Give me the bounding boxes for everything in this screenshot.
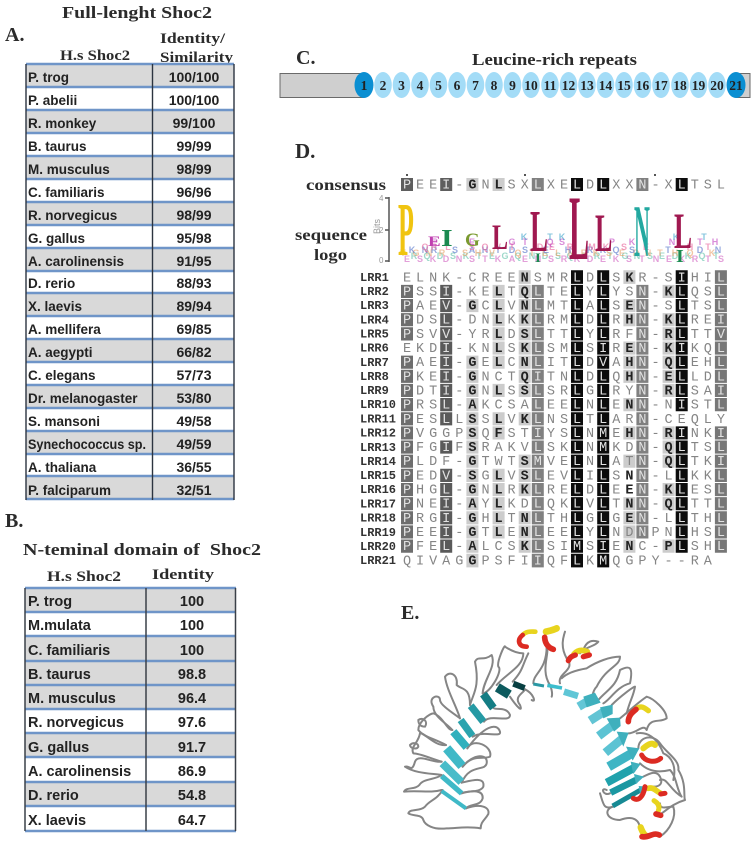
alignment sequences: P KE I - G NCT Q I TN L D L Q H N - E L LD L bbox=[403, 370, 725, 385]
alignment sequences: P VGGP S Q F ST I YS L N M E H N - R I NK I bbox=[403, 427, 725, 442]
panel A identity values: 100/100 bbox=[169, 92, 220, 108]
panel A identity values: 49/59 bbox=[176, 436, 212, 452]
panel A identity values: 91/95 bbox=[176, 253, 212, 269]
alignment row labels: LRR14 bbox=[360, 455, 396, 469]
panel A species names: A. aegypti bbox=[28, 345, 93, 360]
panel A letter: A. bbox=[5, 24, 24, 46]
panel C title: Leucine-rich repeats bbox=[472, 50, 637, 69]
alignment row labels: LRR6 bbox=[360, 342, 389, 356]
repeat numbers: 18 bbox=[673, 78, 687, 93]
alignment row labels: LRR18 bbox=[360, 512, 396, 526]
panel A identity values: 53/80 bbox=[176, 390, 212, 406]
panel B species names: P. trog bbox=[28, 594, 72, 610]
logo large letters: I bbox=[441, 225, 453, 251]
alignment sequences: P AE V - G C L V N L MT L A L S E N -S L TS L bbox=[403, 300, 725, 315]
logo large letters: G bbox=[465, 230, 480, 251]
consensus sequence: P EE I - G N L SX L XE L D L XX N -X L TSL bbox=[403, 178, 725, 194]
repeat numbers: 8 bbox=[491, 78, 498, 93]
alignment sequences: P ED V - S G L V S L EV L I L S N N -L L KK L bbox=[403, 469, 725, 484]
repeat numbers: 7 bbox=[472, 78, 479, 93]
logo axis labels: 2 bbox=[379, 226, 384, 235]
sequence logo label: logo bbox=[314, 247, 347, 264]
consensus dots bbox=[406, 174, 656, 176]
panel A species names: S. mansoni bbox=[28, 414, 100, 429]
sequence logo label: sequence bbox=[295, 227, 367, 244]
panel B identity values: 100 bbox=[180, 643, 204, 659]
panel A species names: Synechococcus sp. bbox=[28, 437, 146, 452]
panel A identity values: 36/55 bbox=[176, 459, 212, 475]
panel A species names: M. musculus bbox=[28, 162, 110, 177]
panel A identity values: 57/73 bbox=[176, 367, 212, 383]
panel B identity values: 96.4 bbox=[178, 691, 206, 707]
logo large letters: I bbox=[676, 247, 684, 267]
panel B species names: M.mulata bbox=[28, 618, 92, 634]
panel A identity values: 98/99 bbox=[176, 207, 212, 223]
panel B species names: D. rerio bbox=[28, 788, 79, 804]
alignment sequences: P SV V -YR L D S L TT L Y L RF N - R L TT V bbox=[403, 328, 726, 343]
alignment row labels: LRR4 bbox=[360, 314, 389, 328]
consensus shading bbox=[401, 178, 688, 191]
alignment row labels: LRR17 bbox=[360, 498, 396, 512]
panel A species names: Dr. melanogaster bbox=[28, 391, 138, 406]
panel B species names: A. carolinensis bbox=[28, 764, 131, 780]
panel A identity values: 99/99 bbox=[176, 138, 212, 154]
alignment sequences: P RS L - A KCSA L EE L N L E N N -N I ST L bbox=[403, 399, 725, 414]
panel A identity values: 89/94 bbox=[176, 298, 212, 314]
panel B species names: B. taurus bbox=[28, 667, 91, 683]
panel B identity values: 100 bbox=[180, 618, 204, 634]
alignment sequences: ELNK-CREE N SMR L D L S K R-S I HI L bbox=[403, 271, 725, 286]
consensus label: consensus bbox=[306, 177, 386, 194]
logo large letters: L bbox=[530, 198, 548, 264]
panel A column headers: Identity/ bbox=[160, 31, 226, 47]
alignment row labels: LRR9 bbox=[360, 384, 389, 398]
alignment row labels bbox=[360, 271, 396, 568]
panel B species names: G. gallus bbox=[28, 740, 89, 756]
panel A species names: A. thaliana bbox=[28, 460, 97, 475]
sequence logo label bbox=[295, 227, 367, 264]
alignment sequences: P DT I - G N L S S L SR L G L RY N - R L SA I bbox=[403, 384, 725, 400]
panel B column headers: H.s Shoc2 bbox=[47, 569, 121, 585]
panel A identity values: 69/85 bbox=[176, 321, 212, 337]
alignment sequences: P EE I - G T L E N L EE L Y L ND N PN L HS L bbox=[403, 526, 725, 541]
alignment row labels: LRR13 bbox=[360, 441, 396, 455]
logo axis bbox=[385, 197, 389, 262]
panel A identity values: 32/51 bbox=[176, 482, 212, 498]
panel B identity values: 100 bbox=[180, 594, 204, 610]
panel A species names: B. taurus bbox=[28, 139, 87, 154]
panel A column headers: Similarity bbox=[160, 50, 234, 66]
logo small letters: ESKDNSTKAENSRKDEKSTNEKRTS bbox=[404, 254, 724, 264]
repeat numbers: 12 bbox=[562, 78, 576, 93]
logo large letters: N bbox=[634, 190, 650, 272]
repeat numbers: 4 bbox=[417, 78, 424, 93]
panel A species names: R. norvegicus bbox=[28, 208, 117, 223]
alignment sequences: P AE I - G E L C N L IT L D V A H N - Q L EH L bbox=[403, 356, 725, 371]
panel B species names: M. musculus bbox=[28, 691, 116, 707]
repeat numbers: 14 bbox=[599, 78, 612, 93]
panel A column headers: H.s Shoc2 bbox=[60, 48, 130, 64]
alignment sequences: P SS I -KE L T Q L TE L Y L YS N - K L QS L bbox=[403, 285, 725, 300]
repeat numbers: 11 bbox=[544, 78, 557, 93]
alignment row labels: LRR10 bbox=[360, 398, 396, 412]
repeat numbers: 20 bbox=[710, 78, 724, 93]
alignment row labels: LRR3 bbox=[360, 299, 389, 313]
panel B identity values: 91.7 bbox=[178, 740, 206, 756]
logo axis labels bbox=[372, 194, 384, 265]
panel C letter: C. bbox=[296, 47, 315, 69]
repeat numbers bbox=[361, 78, 743, 93]
alignment row labels: LRR20 bbox=[360, 540, 396, 554]
panel A identity values: 49/58 bbox=[176, 413, 212, 429]
repeat numbers: 10 bbox=[524, 78, 538, 93]
panel A identity values: 95/98 bbox=[176, 230, 212, 246]
panel B identity values: 86.9 bbox=[178, 764, 206, 780]
panel B: N-terminal domain table bbox=[5, 510, 261, 831]
alignment sequences: P NE I - A Y L KD L QK L V L T N N - Q L TT L bbox=[403, 498, 725, 513]
alignment row labels: LRR1 bbox=[360, 271, 389, 285]
repeat numbers: 19 bbox=[692, 78, 706, 93]
panel B title: N-teminal domain of Shoc2 bbox=[23, 540, 261, 559]
panel A species names: G. gallus bbox=[28, 231, 85, 246]
repeat numbers: 6 bbox=[454, 78, 461, 93]
alignment row labels: LRR15 bbox=[360, 469, 396, 483]
alignment sequences: P HG L - G N L R K L RE L D L E E N - K L ES L bbox=[403, 484, 725, 498]
panel A identity values: 88/93 bbox=[176, 275, 212, 291]
alignment sequences: P FE L - A LCS K L SI M S I E N C- P L SH L bbox=[403, 540, 725, 555]
alignment sequences bbox=[403, 271, 726, 569]
protein loops bbox=[404, 632, 685, 837]
alignment row labels: LRR8 bbox=[360, 370, 389, 384]
logo small letters: QRLSQVTDERMKSEHT bbox=[421, 242, 711, 252]
logo large letters: L bbox=[569, 177, 589, 279]
panel A column headers bbox=[60, 31, 234, 66]
panel B grid lines bbox=[25, 588, 236, 831]
repeat numbers: 2 bbox=[380, 78, 387, 93]
alignment sequences: EKD I -KN L S K L SM L S I R E N - K I KQ L bbox=[403, 342, 725, 357]
panel A species names: P. abelii bbox=[28, 93, 77, 108]
alignment sequences: P LDF- G TWT S M VE L N L AT N - Q L TK I bbox=[403, 455, 725, 470]
logo small letters bbox=[400, 232, 724, 264]
panel A identity values: 100/100 bbox=[169, 69, 220, 85]
panel A species names: R. monkey bbox=[28, 116, 97, 131]
logo large letters: P bbox=[398, 188, 414, 272]
beta strands bbox=[442, 684, 641, 808]
logo small letters: RQDSKTEGQNDSQKRTGNSEDKQT bbox=[411, 251, 719, 261]
panel D letter: D. bbox=[295, 139, 315, 163]
panel B species names bbox=[28, 594, 131, 829]
alignment shading columns bbox=[395, 270, 730, 567]
panel B species names: X. laevis bbox=[28, 813, 86, 829]
panel B identity values: 97.6 bbox=[178, 715, 206, 731]
panel A title: Full-lenght Shoc2 bbox=[62, 3, 212, 22]
logo small letters: TGNRSHVQTELNRKSEDNTHQK bbox=[400, 248, 716, 258]
repeat numbers: 13 bbox=[580, 78, 594, 93]
panel B identity values: 98.8 bbox=[178, 667, 206, 683]
repeat numbers: 9 bbox=[509, 78, 516, 93]
repeat numbers: 3 bbox=[398, 78, 405, 93]
alignment row labels: LRR11 bbox=[360, 412, 396, 426]
panel B letter: B. bbox=[5, 510, 23, 532]
repeat ovals bbox=[354, 72, 746, 98]
repeat numbers: 21 bbox=[729, 78, 743, 93]
panel A identity values: 66/82 bbox=[176, 344, 212, 360]
panel A identity values bbox=[169, 69, 220, 498]
repeat numbers: 15 bbox=[617, 78, 631, 93]
repeat numbers: 5 bbox=[435, 78, 442, 93]
alignment sequences: P DS L -DN L K K L RM L D L R H N - K L RE I bbox=[403, 314, 725, 329]
panel E: protein ribbon structure bbox=[404, 628, 685, 837]
logo large letters: E bbox=[428, 233, 441, 250]
panel B identity values: 54.8 bbox=[178, 788, 206, 804]
alignment sequences: P FG I F S RAKV L SK L N M KD N - Q L TS L bbox=[403, 441, 725, 456]
logo large letters: L bbox=[595, 204, 612, 264]
logo axis labels: Bits bbox=[372, 218, 382, 234]
logo large letters: L bbox=[492, 217, 508, 257]
panel A identity values: 96/96 bbox=[176, 184, 212, 200]
panel B species names: R. norvegicus bbox=[28, 715, 124, 731]
logo small letters: KNRSAHTDSEHRKQSTDN bbox=[409, 245, 721, 255]
repeat numbers: 17 bbox=[654, 78, 668, 93]
panel B column headers bbox=[47, 567, 215, 585]
alignment row labels: LRR12 bbox=[360, 426, 396, 440]
panel A row shading bbox=[26, 64, 234, 499]
alignment row labels: LRR19 bbox=[360, 526, 396, 540]
alignment row labels: LRR16 bbox=[360, 483, 396, 497]
panel B identity values bbox=[178, 594, 206, 829]
panel A species names: X. laevis bbox=[28, 299, 82, 314]
logo large letters: I bbox=[535, 251, 541, 266]
alignment row labels: LRR5 bbox=[360, 328, 389, 342]
alignment row labels: LRR2 bbox=[360, 285, 389, 299]
panel A: full-length Shoc2 table bbox=[5, 3, 234, 500]
panel B column headers: Identity bbox=[152, 567, 215, 583]
logo axis labels: 4 bbox=[379, 194, 384, 203]
logo small letters: KTKKT bbox=[521, 232, 707, 242]
logo large letters: L bbox=[674, 203, 692, 259]
panel B species names: C. familiaris bbox=[28, 643, 110, 659]
panel A species names: A. mellifera bbox=[28, 322, 101, 337]
alignment sequences: P ES L L S S L V K L NS L T L AR N -CEQLY bbox=[403, 413, 725, 428]
alignment sequences: QIVAG G PSFI I QF L K M QGPY--RA bbox=[403, 554, 713, 569]
panel A species names: C. familiaris bbox=[28, 185, 105, 200]
panel A species names bbox=[28, 70, 146, 498]
panel A species names: D. rerio bbox=[28, 276, 75, 291]
panel A grid lines bbox=[26, 64, 234, 499]
strand arrow heads bbox=[583, 693, 649, 793]
protein bar bbox=[280, 74, 750, 98]
alignment sequences: P RG I - G H L T N L TH L G L G E N -L L TH L bbox=[403, 512, 725, 527]
repeat numbers: 16 bbox=[636, 78, 650, 93]
panel A identity values: 99/100 bbox=[173, 115, 216, 131]
sequence logo bbox=[372, 177, 724, 279]
panel B row shading bbox=[25, 588, 236, 806]
panel E letter: E. bbox=[401, 602, 419, 624]
logo small letters: EEGTQSPKNTH bbox=[431, 237, 718, 247]
alignment row labels: LRR7 bbox=[360, 356, 389, 370]
logo axis labels: 0 bbox=[379, 256, 384, 265]
alignment row labels: LRR21 bbox=[360, 554, 396, 568]
panel A species names: C. elegans bbox=[28, 368, 96, 383]
logo large letters bbox=[398, 177, 692, 279]
panel A species names: A. carolinensis bbox=[28, 254, 124, 269]
panel D: alignment and sequence logo bbox=[295, 139, 730, 569]
panel B identity values: 64.7 bbox=[178, 813, 206, 829]
panel A species names: P. falciparum bbox=[28, 483, 111, 498]
panel C: leucine-rich repeats domain bar bbox=[280, 47, 750, 98]
panel A species names: P. trog bbox=[28, 70, 69, 85]
panel A identity values: 98/99 bbox=[176, 161, 212, 177]
alpha helices bbox=[519, 628, 665, 837]
repeat numbers: 1 bbox=[361, 78, 368, 93]
